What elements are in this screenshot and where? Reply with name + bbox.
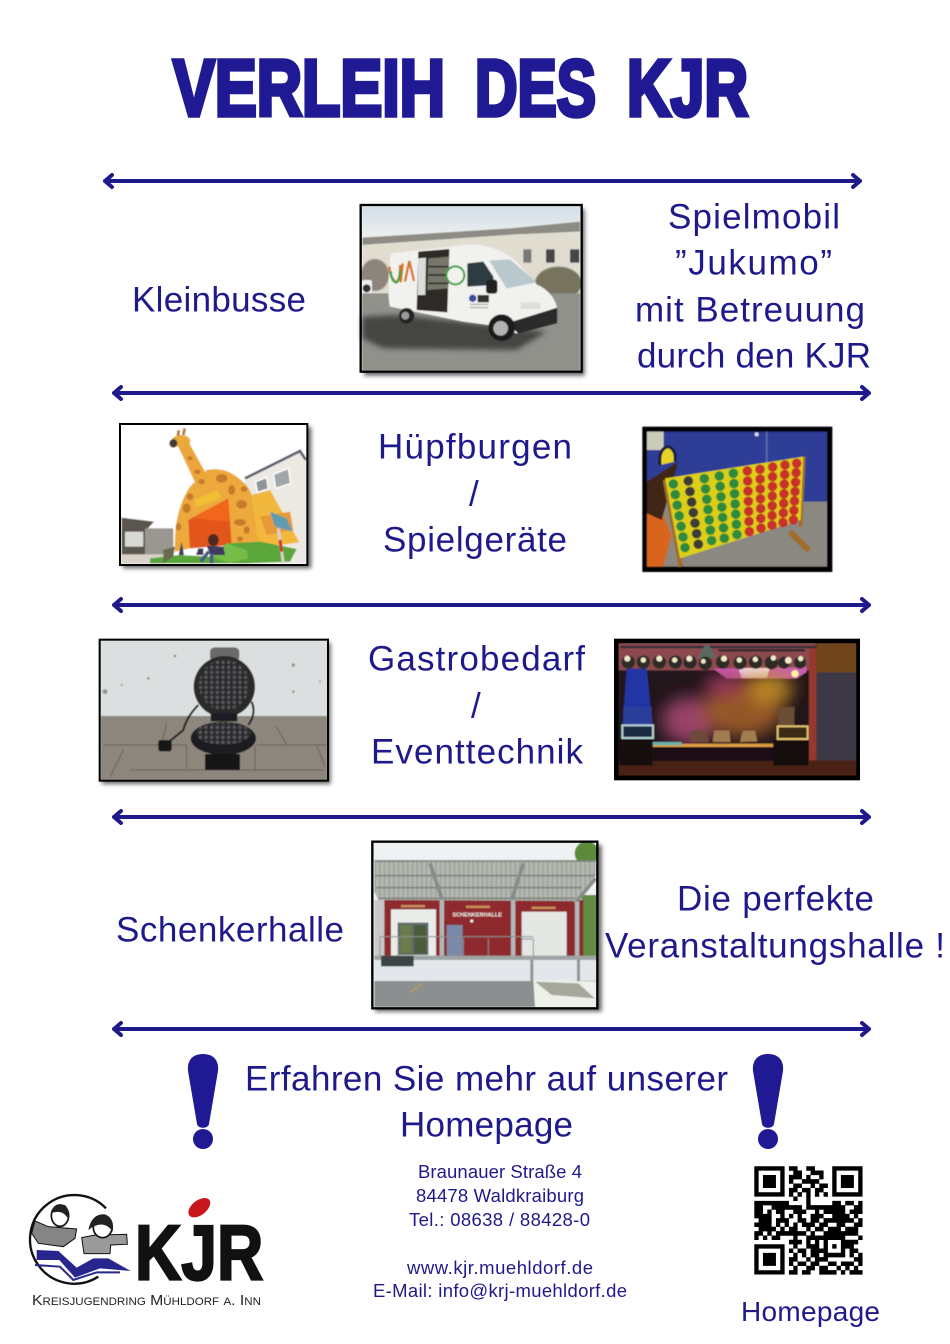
logo: KJR — [30, 1194, 263, 1309]
photo: van — [361, 205, 585, 376]
title: KJR — [627, 44, 748, 132]
photo: bouncy castle giraffe — [120, 424, 311, 568]
photo: waffle iron — [100, 640, 331, 784]
title: DES — [475, 44, 596, 132]
arrow: divider 1 — [105, 175, 860, 187]
text: Spielmobil Jukumo: mit Betreuung — [635, 290, 865, 330]
text: address and contact: E-Mail: info@krj-muehldorf.de — [373, 1280, 627, 1301]
text: Gastrobedarf / Eventtechnik: Eventtechnik — [371, 732, 584, 772]
text: Spielmobil Jukumo: Spielmobil — [668, 198, 840, 236]
photo: Schenkerhalle building — [372, 841, 602, 1012]
arrow: divider 2 — [114, 387, 869, 399]
text: address and contact: Braunauer Straße 4 — [418, 1161, 582, 1182]
text: Hüpfburgen / Spielgeräte — [378, 428, 572, 560]
text: Hüpfburgen / Spielgeräte: / — [469, 474, 479, 514]
text: Gastrobedarf / Eventtechnik — [368, 640, 585, 772]
text: homepage call to action: Homepage — [400, 1106, 573, 1144]
text: Schenkerhalle: Schenkerhalle — [116, 910, 344, 950]
text: Spielmobil Jukumo: durch den KJR — [637, 336, 871, 376]
photo: Schenkerhalle building: SCHENKERHALLE — [452, 913, 502, 919]
arrow: divider 5 — [114, 1023, 869, 1035]
text: homepage call to action — [245, 1060, 728, 1144]
photo: connect four game — [642, 427, 832, 572]
text: Die perfekte Veranstaltungshalle — [605, 880, 945, 966]
icon: left exclamation mark — [188, 1054, 218, 1149]
text: Hüpfburgen / Spielgeräte: Spielgeräte — [383, 520, 567, 560]
icon: QR code — [754, 1168, 863, 1272]
text: address and contact: Tel.: 08638 / 88428-0 — [409, 1209, 590, 1230]
text: address and contact — [373, 1161, 627, 1301]
title — [173, 44, 748, 132]
logo: KJR: Kreisjugendring Mühldorf a. Inn — [32, 1292, 261, 1309]
text: Hüpfburgen / Spielgeräte: Hüpfburgen — [378, 428, 572, 466]
logo: KJR: KJR — [135, 1208, 263, 1296]
arrow: divider 3 — [114, 599, 869, 611]
text: QR caption Homepage: Homepage — [741, 1296, 880, 1327]
text: Spielmobil Jukumo: ”Jukumo” — [675, 244, 832, 282]
text: address and contact: 84478 Waldkraiburg — [416, 1185, 584, 1206]
icon: right exclamation mark — [753, 1054, 783, 1149]
text: Spielmobil Jukumo — [635, 198, 871, 376]
arrow: divider 4 — [114, 811, 869, 823]
text: address and contact: www.kjr.muehldorf.de — [406, 1257, 593, 1278]
text: Gastrobedarf / Eventtechnik: / — [471, 686, 481, 726]
title: VERLEIH — [173, 44, 445, 132]
photo: stage with lights — [614, 639, 860, 780]
text: homepage call to action: Erfahren Sie mehr auf unserer — [245, 1060, 728, 1098]
text: Die perfekte Veranstaltungshalle: Veranstaltungshalle ! — [605, 926, 945, 966]
text: Gastrobedarf / Eventtechnik: Gastrobedarf — [368, 640, 585, 678]
text: Die perfekte Veranstaltungshalle: Die perfekte — [677, 880, 874, 918]
text: Kleinbusse: Kleinbusse — [132, 280, 306, 320]
